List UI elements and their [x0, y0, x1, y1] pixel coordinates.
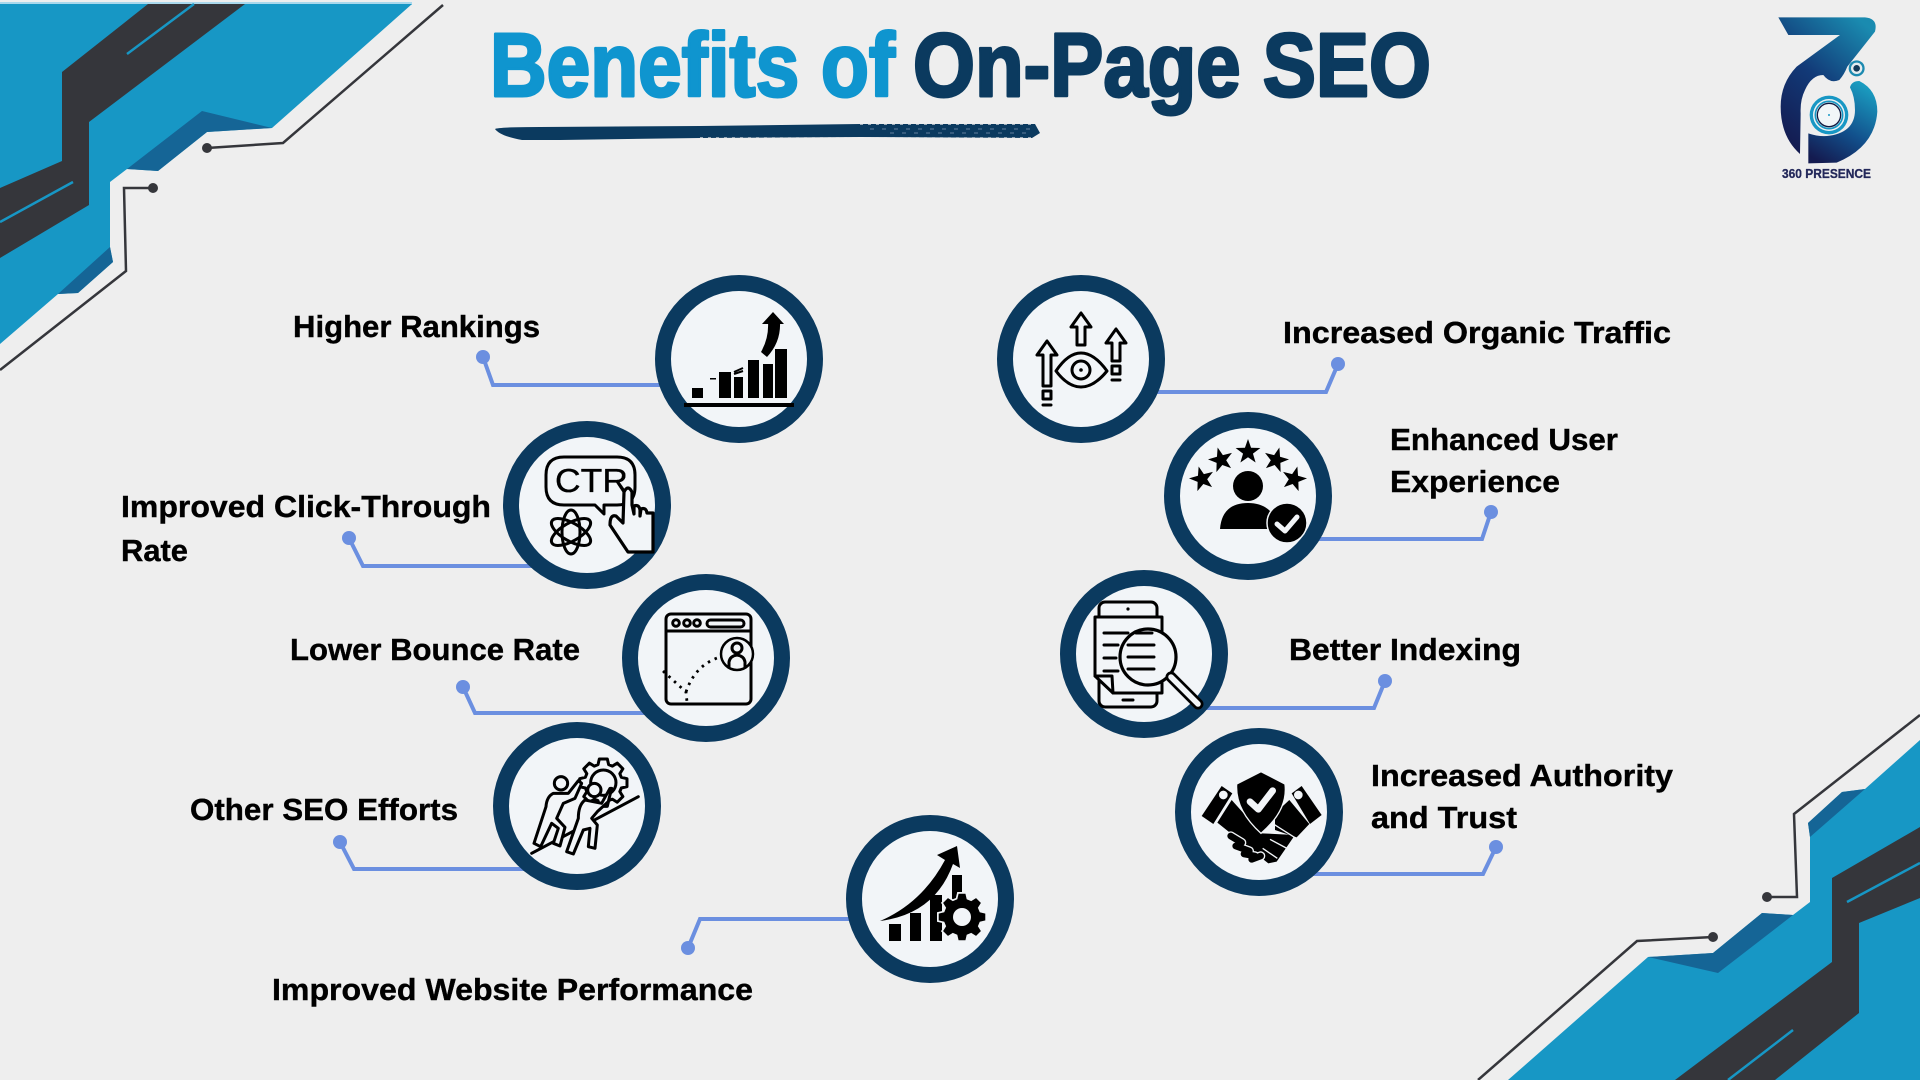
connector dot: click-through rate [342, 531, 356, 545]
decoration: bottom-right corner [1478, 715, 1920, 1080]
connector dot: other SEO efforts [333, 835, 347, 849]
label: Increased Organic Traffic: Increased Organic Traffic [1283, 315, 1671, 350]
label: Lower Bounce Rate: Lower Bounce Rate [290, 632, 580, 667]
title: On-Page SEO [913, 16, 1431, 116]
connector: other SEO efforts [340, 842, 545, 869]
connector dot: user experience [1484, 505, 1498, 519]
label: Improved Click-Through Rate: Rate [121, 533, 188, 568]
label: Improved Click-Through Rate [121, 489, 491, 568]
connector: user experience [1300, 512, 1491, 539]
circle icon: CTR click: CTR [555, 462, 628, 499]
connector: click-through rate [349, 538, 550, 566]
title brush underline [495, 124, 1040, 140]
logo: 360 Presence [1778, 17, 1877, 181]
connector: higher rankings [483, 357, 670, 385]
connector dot: website performance [681, 941, 695, 955]
circle icon: higher rankings [663, 283, 815, 435]
title: Benefits of [490, 16, 896, 116]
circle icon: user experience [1172, 420, 1324, 572]
circle icon: other SEO efforts [501, 730, 653, 882]
label: Other SEO Efforts: Other SEO Efforts [190, 792, 458, 827]
circle icon: bounce rate [630, 582, 782, 734]
circle icon: organic traffic [1005, 283, 1157, 435]
connector dot: higher rankings [476, 350, 490, 364]
label: Increased Authority and Trust: and Trust [1371, 800, 1517, 835]
circle icon: indexing [1068, 578, 1220, 730]
circle icon: CTR click [511, 429, 663, 581]
circle icon: website performance [854, 823, 1006, 975]
connector: indexing [1180, 681, 1385, 708]
label: Increased Authority and Trust [1371, 758, 1674, 835]
decoration: top-left corner [0, 2, 443, 370]
connector: bounce rate [463, 687, 660, 713]
connector dot: authority [1489, 840, 1503, 854]
label: Increased Authority and Trust: Increased Authority [1371, 758, 1674, 793]
label: Enhanced User Experience: Enhanced User [1390, 422, 1618, 457]
connector dot: bounce rate [456, 680, 470, 694]
label: Improved Website Performance: Improved Website Performance [272, 972, 753, 1007]
connector: authority [1290, 847, 1496, 874]
label: Better Indexing: Better Indexing [1289, 632, 1521, 667]
connector dot: organic traffic [1331, 357, 1345, 371]
logo: 360 Presence: 360 PRESENCE [1782, 166, 1871, 181]
connector: organic traffic [1140, 364, 1338, 392]
circle icon: authority and trust [1183, 736, 1335, 888]
title [490, 16, 1431, 116]
label: Enhanced User Experience [1390, 422, 1618, 499]
label: Improved Click-Through Rate: Improved Click-Through [121, 489, 491, 524]
connector: website performance [688, 919, 870, 948]
label: Enhanced User Experience: Experience [1390, 464, 1560, 499]
label: Higher Rankings: Higher Rankings [293, 309, 540, 344]
connector dot: indexing [1378, 674, 1392, 688]
